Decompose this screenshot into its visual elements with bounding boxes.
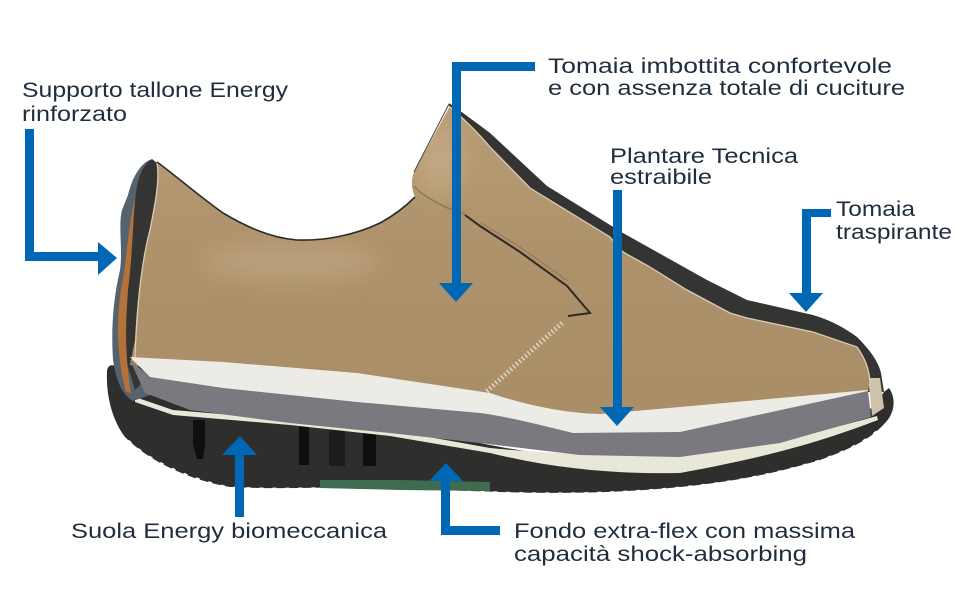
sole — [107, 365, 894, 493]
sole tread notches — [128, 429, 880, 494]
toe pale edge — [868, 378, 884, 416]
label: insole: estraibile — [610, 165, 712, 189]
midsole white layer — [135, 397, 878, 473]
tongue left dark edge — [414, 104, 449, 172]
label: sole: Suola Energy biomeccanica — [71, 519, 387, 543]
label: padded upper: Tomaia imbottita confortevole — [548, 54, 892, 78]
label: extra-flex bottom: Fondo extra-flex con massima — [514, 519, 855, 543]
lining pale edge — [135, 107, 870, 385]
label: padded upper: e con assenza totale di cuciture — [548, 76, 905, 100]
insole grey foam — [130, 360, 871, 457]
arrow: sole — [222, 436, 257, 517]
pocket cut line — [465, 215, 590, 316]
stitch line above cut — [480, 222, 568, 281]
shoe illustration — [107, 100, 894, 494]
orange heel counter — [118, 198, 135, 393]
heel foam layer — [123, 159, 158, 390]
label: extra-flex bottom: capacità shock-absorbing — [514, 542, 807, 566]
highlight: collar — [213, 244, 368, 280]
label: heel support: rinforzato — [22, 102, 127, 126]
flap fold shadow — [414, 186, 465, 214]
label: breathable upper: Tomaia — [836, 197, 915, 221]
arrow: extra-flex bottom — [429, 463, 500, 535]
insole white top — [130, 357, 868, 433]
arrow: insole — [600, 190, 634, 426]
sole slots — [193, 420, 376, 466]
label: breathable upper: traspirante — [836, 220, 952, 244]
arrow: padded upper — [439, 62, 535, 302]
highlight: tongue — [418, 129, 462, 193]
collar dark edge — [157, 162, 415, 240]
zigzag stitching — [486, 323, 562, 392]
label: heel support: Supporto tallone Energy — [22, 78, 288, 102]
arrow: heel support — [25, 129, 117, 275]
upper outer heel layer — [112, 159, 152, 401]
green sole insert — [320, 480, 490, 491]
tongue and vamp dark band — [449, 103, 884, 392]
label: insole: Plantare Tecnica — [610, 144, 798, 168]
tan inner lining — [120, 100, 880, 430]
arrow: breathable upper — [789, 209, 831, 312]
